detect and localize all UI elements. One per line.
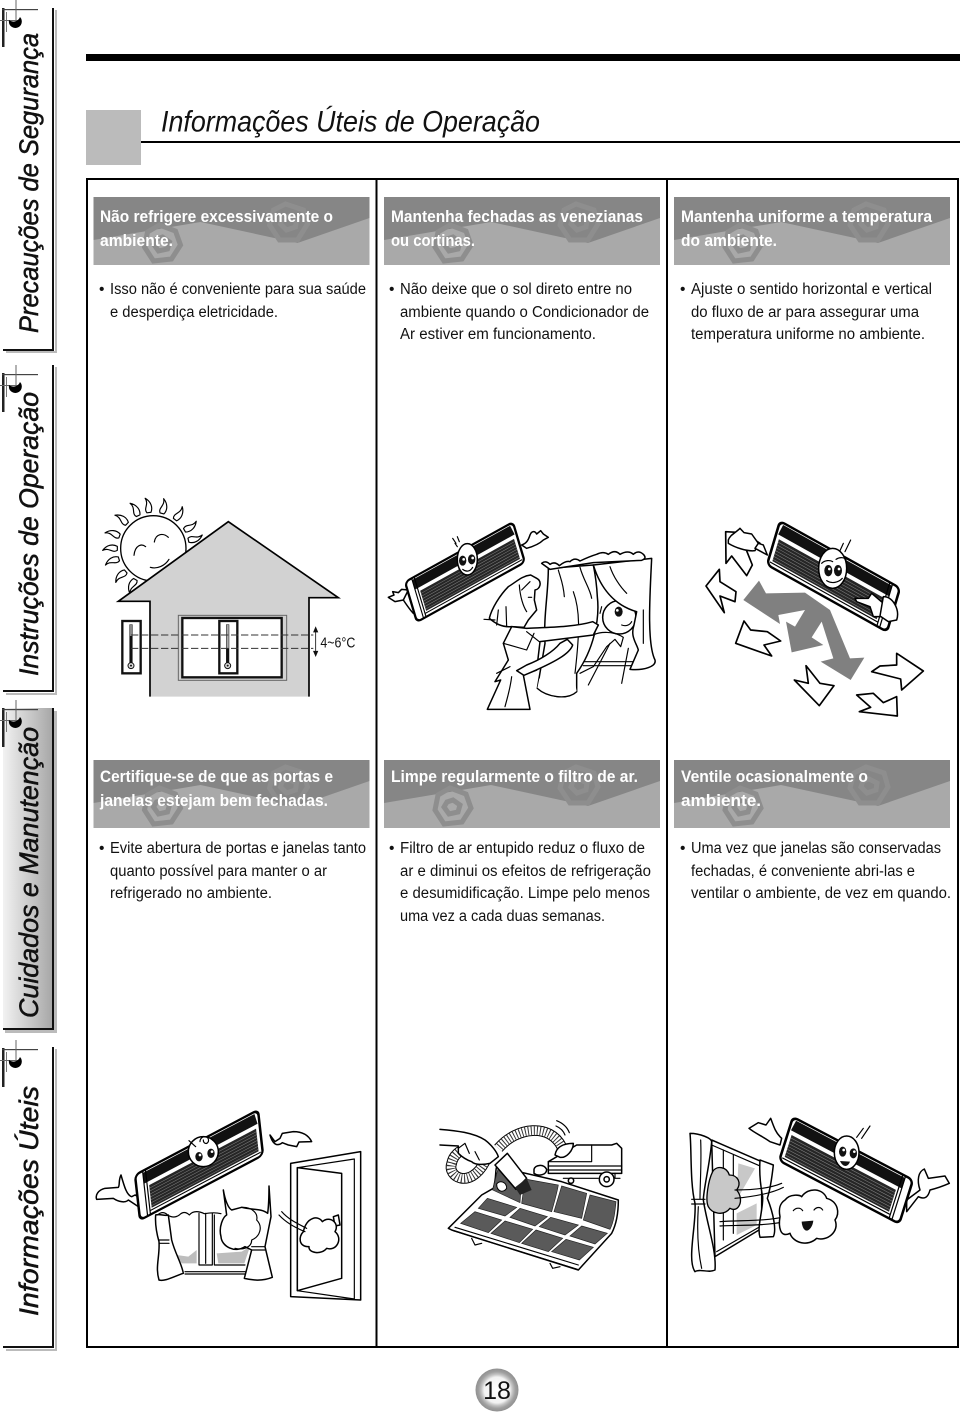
smiling cloud [779,1190,838,1243]
hands [388,531,548,613]
text: Filtro de ar: Filtro de ar entupido reduz o fluxo de [400,840,645,857]
side tab: Cuidados e Manutenção (active) [0,700,57,1033]
text: Filtro de ar: uma vez a cada duas semanas. [400,908,605,925]
panel: header Mantenha uniforme [674,197,950,265]
text: Filtro de ar: • [389,840,394,857]
hands [728,528,898,622]
woman [484,575,598,709]
hands [96,1132,312,1207]
window [178,615,287,680]
illustration: airflow [706,521,923,716]
character face [834,1126,870,1169]
curtain left [156,1215,183,1280]
text: Não deixe que o sol [389,281,649,343]
icon: air conditioner [767,521,900,632]
panel: header Mantenha fechadas: Mantenha fechadas as venezianas [391,208,643,226]
text: Evite abertura [99,840,366,902]
text: Ajuste o sentido [680,281,932,343]
character face [819,540,851,588]
panel: header Mantenha fechadas [384,197,660,265]
text: Evite abertura: quanto possível para manter o ar [110,863,327,880]
text: Isso não é conveniente: • [99,281,104,298]
icon: inside thermometer [219,621,237,673]
curtain left [690,1133,715,1272]
text: Ajuste o sentido: do fluxo de ar para assegurar uma [691,304,919,321]
icon: air conditioner [779,1117,913,1224]
panel: header Mantenha uniforme: Mantenha uniforme a temperatura [681,208,933,226]
gray airflow arrows [743,581,864,680]
curtain right [593,558,655,670]
page number badge: 18 [483,1377,511,1405]
side tab: Cuidados e Manutenção (active): Cuidados e Manutenção [14,727,44,1018]
text: Não deixe que o sol: Não deixe que o sol direto entre no [400,281,632,298]
illustration: doors and windows [96,1110,361,1300]
illustration: ventilating room [690,1117,949,1272]
icon: outside thermometer [122,621,141,673]
hose [451,1131,562,1178]
vacuum cleaner [548,1143,622,1187]
side tab: Precauções de Segurança: Precauções de Segurança [14,33,44,333]
side tab: Precauções de Segurança [0,0,57,353]
side tab: Instruções de Operação: Instruções de Operação [14,392,44,676]
text: Isso não é conveniente: Isso não é conveniente para sua saúde [110,281,366,298]
text: Ajuste o sentido: Ajuste o sentido horizontal e vertical [691,281,932,298]
icon: house [118,522,338,697]
text: Evite abertura: • [99,840,104,857]
side tab: Instruções de Operação [0,365,57,695]
panel: header Limpe regularmente: Limpe regularmente o filtro de ar. [391,768,638,786]
panel: header Ventile: Ventile ocasionalmente o [681,768,868,786]
text: Filtro de ar: e desumidificação. Limpe pelo menos [400,885,650,902]
text: Uma vez que [680,840,951,902]
panel: header Mantenha uniforme: do ambiente. [681,232,777,250]
window [712,1140,762,1257]
title block: Informações Úteis de Operação [161,106,540,138]
temperature label: 4~6°C [320,636,356,652]
window [185,1213,245,1274]
panel: header Limpe regularmente [384,760,660,828]
text: Filtro de ar: ar e diminui os efeitos de refrigeração [400,863,651,880]
side tab: Informações Úteis: Informações Úteis [13,1086,44,1316]
text: Uma vez que: ventilar o ambiente, de vez em quando. [691,885,951,902]
illustration: cleaning filter [440,1121,622,1270]
dashed temperature lines [131,635,313,648]
gray cloud [707,1168,740,1213]
title block [86,106,960,165]
door [291,1152,361,1300]
text: Não deixe que o sol: • [389,281,394,298]
main frame with three columns [87,179,958,1347]
panel: header Certifique-se [94,760,370,828]
icon: air conditioner [405,522,525,622]
curtain right and gust [220,1186,272,1280]
illustration: closing curtains [388,522,655,709]
text: Não deixe que o sol: Ar estiver em funcionamento. [400,326,596,343]
wind lines [720,1183,785,1226]
small curtain [759,1160,775,1237]
text: Uma vez que: fechadas, é conveniente abri-las e [691,863,915,880]
icon: air conditioner [135,1110,263,1220]
filter mesh panels [461,1167,616,1260]
character face [453,537,477,575]
side tab: Informações Úteis [0,1040,57,1351]
page number badge [476,1368,518,1412]
wind lines [279,1212,307,1232]
text: Filtro de ar [389,840,651,925]
panel: header Mantenha fechadas: ou cortinas. [391,232,475,250]
icon: sun [103,498,203,594]
text: Uma vez que: Uma vez que janelas são conservadas [691,840,941,857]
text: Ajuste o sentido: • [680,281,685,298]
panel: header Certifique-se: Certifique-se de que as portas e [100,768,333,786]
sun behind window [603,601,636,634]
panel: header Não refrigere: Não refrigere excessivamente o [100,208,333,226]
text: Ajuste o sentido: temperatura uniforme no ambiente. [691,326,925,343]
text: Isso não é conveniente [99,281,366,321]
text: Não deixe que o sol: ambiente quando o Condicionador de [400,304,649,321]
cloud at door [300,1218,339,1253]
hand holding nozzle [495,1153,527,1189]
curtain hem [537,677,577,697]
dust clouds [534,1165,547,1175]
top black bar [86,54,960,61]
panel: header Certifique-se: janelas estejam bem fechadas. [99,792,328,810]
valance [158,1212,221,1217]
text: Evite abertura: refrigerado no ambiente. [110,885,272,902]
window sill [583,643,633,685]
curtain left [537,565,598,697]
filter frame [448,1167,618,1270]
text: Evite abertura: Evite abertura de portas e janelas tanto [110,840,366,857]
text: Isso não é conveniente: e desperdiça eletricidade. [110,304,278,321]
panel: header Ventile: ambiente. [681,792,761,810]
curtain valance [542,552,645,569]
panel: header Não refrigere [94,197,370,265]
illustration: house and sun [103,498,356,697]
temperature arrow [314,627,318,656]
hands [749,1118,949,1212]
panel: header Não refrigere: ambiente. [100,232,173,250]
panel: header Ventile [674,760,950,828]
house outline [118,522,338,697]
white arrows [706,532,923,716]
character face [188,1137,218,1167]
text: Uma vez que: • [680,840,685,857]
